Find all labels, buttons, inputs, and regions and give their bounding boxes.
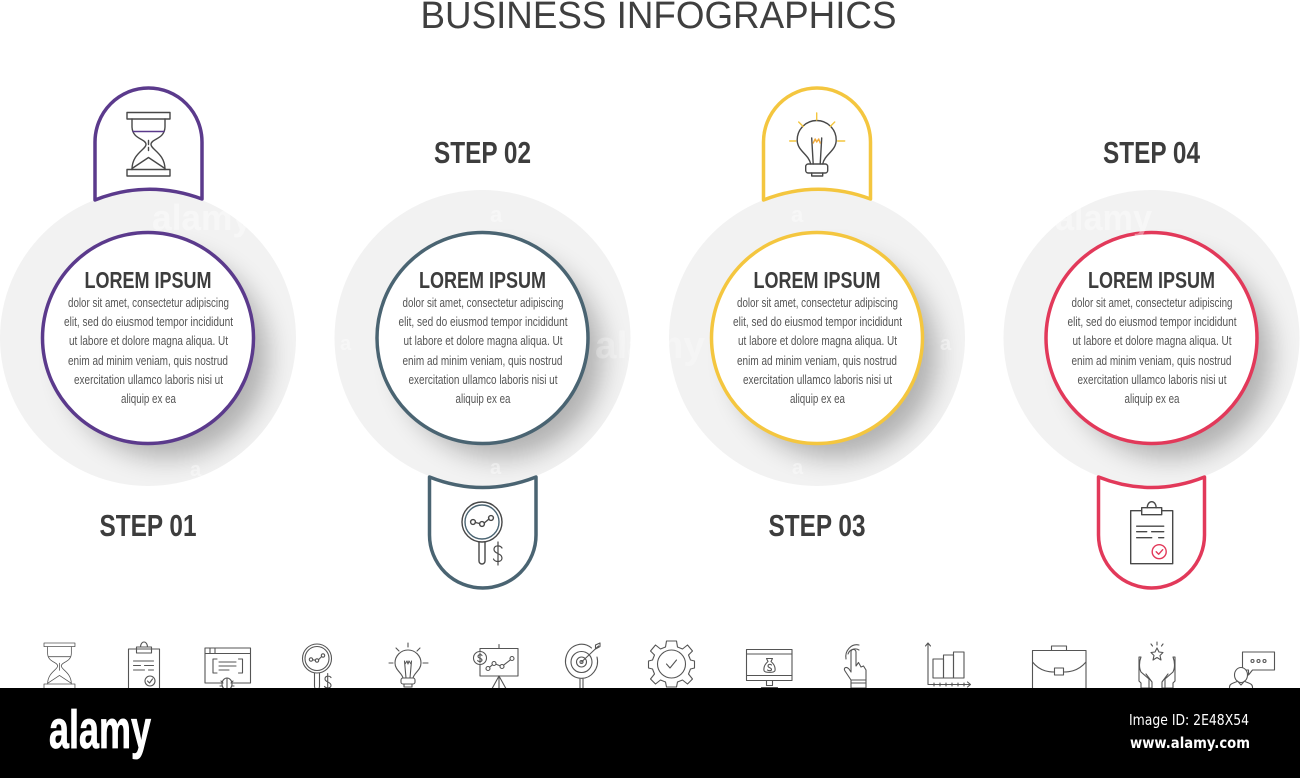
icon: light bulb <box>790 113 845 176</box>
disc shadow 4 <box>1068 254 1272 458</box>
icon: hourglass small <box>44 643 75 688</box>
body text 4: aliquip ex ea <box>1124 391 1180 406</box>
icon: hands with star <box>1139 642 1175 688</box>
disc shadow 1 <box>64 254 268 458</box>
outer disc 2 <box>334 190 630 486</box>
icon: person with speech bubble <box>1230 652 1274 689</box>
body text 2: aliquip ex ea <box>456 391 511 406</box>
icon: presentation board <box>474 644 518 690</box>
body text 4: elit, sed do eiusmod tempor incididunt <box>1068 314 1237 329</box>
outer disc 1 <box>0 190 296 486</box>
step label 2: STEP 02 <box>434 135 531 170</box>
body text 4: dolor sit amet, consectetur adipiscing <box>1072 295 1232 310</box>
outer disc 4 <box>1004 190 1300 486</box>
heading 2: LOREM IPSUM <box>419 267 546 293</box>
icon: gear with check <box>648 641 694 687</box>
watermark traces: a <box>340 333 352 355</box>
watermark traces: alamy <box>595 325 705 367</box>
icon: bar chart <box>926 643 970 687</box>
watermark traces: a <box>940 333 952 355</box>
body text 4: ut labore et dolore magna aliqua. Ut <box>1072 333 1232 348</box>
body text 1: elit, sed do eiusmod tempor incididunt <box>64 314 233 329</box>
body text 2: exercitation ullamco laboris nisi ut <box>408 372 558 387</box>
watermark traces <box>152 197 1152 481</box>
heading 3: LOREM IPSUM <box>754 267 880 293</box>
heading 4: LOREM IPSUM <box>1088 267 1215 293</box>
text circle 1 <box>42 232 254 444</box>
body text 3: enim ad minim veniam, quis nostrud <box>737 353 897 368</box>
icon: touch hand <box>844 645 866 688</box>
body text 4: exercitation ullamco laboris nisi ut <box>1078 372 1227 387</box>
body text 3 <box>733 295 902 406</box>
badge 2 <box>430 477 536 588</box>
body text 2 <box>398 295 568 406</box>
step label 4: STEP 04 <box>1103 135 1201 170</box>
badge 3 <box>764 88 870 200</box>
body text 3: dolor sit amet, consectetur adipiscing <box>737 295 898 310</box>
body text 1: aliquip ex ea <box>121 391 177 406</box>
panel: step 01 <box>0 88 296 543</box>
icon: clipboard small <box>128 642 160 689</box>
step label 1: STEP 01 <box>100 508 196 543</box>
body text 4 <box>1068 295 1237 406</box>
footer url: www.alamy.com <box>1130 734 1250 752</box>
icon: browser certificate <box>205 648 250 690</box>
badge 4 <box>1098 477 1204 588</box>
body text 3: ut labore et dolore magna aliqua. Ut <box>738 333 897 348</box>
body text 1: dolor sit amet, consectetur adipiscing <box>68 295 229 310</box>
panel: step 04 <box>1004 135 1300 588</box>
watermark traces: a <box>490 202 503 227</box>
body text 1: ut labore et dolore magna aliqua. Ut <box>69 333 228 348</box>
watermark traces: a <box>190 459 202 481</box>
icon: target with arrow <box>566 643 600 689</box>
watermark traces: a <box>490 457 502 479</box>
icon: monitor with money bag <box>746 650 792 690</box>
panel: step 03 <box>669 88 965 543</box>
bottom icon row <box>44 641 1274 692</box>
panel: step 02 <box>334 135 630 588</box>
body text 2: dolor sit amet, consectetur adipiscing <box>402 295 564 310</box>
body text 1 <box>64 295 233 406</box>
body text 2: enim ad minim veniam, quis nostrud <box>402 353 562 368</box>
body text 2: ut labore et dolore magna aliqua. Ut <box>404 333 563 348</box>
body text 1: exercitation ullamco laboris nisi ut <box>74 372 223 387</box>
watermark traces: alamy <box>152 197 252 238</box>
body text 4: enim ad minim veniam, quis nostrud <box>1072 353 1232 368</box>
step label 3: STEP 03 <box>768 508 866 543</box>
body text 2: elit, sed do eiusmod tempor incididunt <box>398 314 568 329</box>
badge 1 <box>95 88 202 200</box>
watermark traces: alamy <box>1055 197 1152 238</box>
watermark traces: a <box>792 457 804 479</box>
text circle 4 <box>1046 232 1257 444</box>
image id: Image ID: 2E48X54 <box>1129 711 1249 729</box>
icon: hourglass <box>127 112 170 176</box>
body text 1: enim ad minim veniam, quis nostrud <box>68 353 228 368</box>
outer disc 3 <box>669 190 965 486</box>
body text 3: aliquip ex ea <box>790 391 846 406</box>
icon: clipboard <box>1131 502 1173 564</box>
disc shadow 3 <box>733 254 937 458</box>
footer logo: alamy <box>49 700 151 760</box>
heading 1: LOREM IPSUM <box>84 267 212 293</box>
footer band <box>0 688 1300 778</box>
watermark traces: a <box>791 202 804 227</box>
icon: magnifier with dollar <box>462 502 502 565</box>
body text 3: exercitation ullamco laboris nisi ut <box>743 372 892 387</box>
body text 3: elit, sed do eiusmod tempor incididunt <box>733 314 902 329</box>
icon: magnifier small <box>302 644 332 692</box>
icon: briefcase <box>1032 646 1086 692</box>
icon: bulb small <box>389 643 428 687</box>
text circle 2 <box>377 232 588 444</box>
text circle 3 <box>712 232 922 444</box>
disc shadow 2 <box>398 254 602 458</box>
